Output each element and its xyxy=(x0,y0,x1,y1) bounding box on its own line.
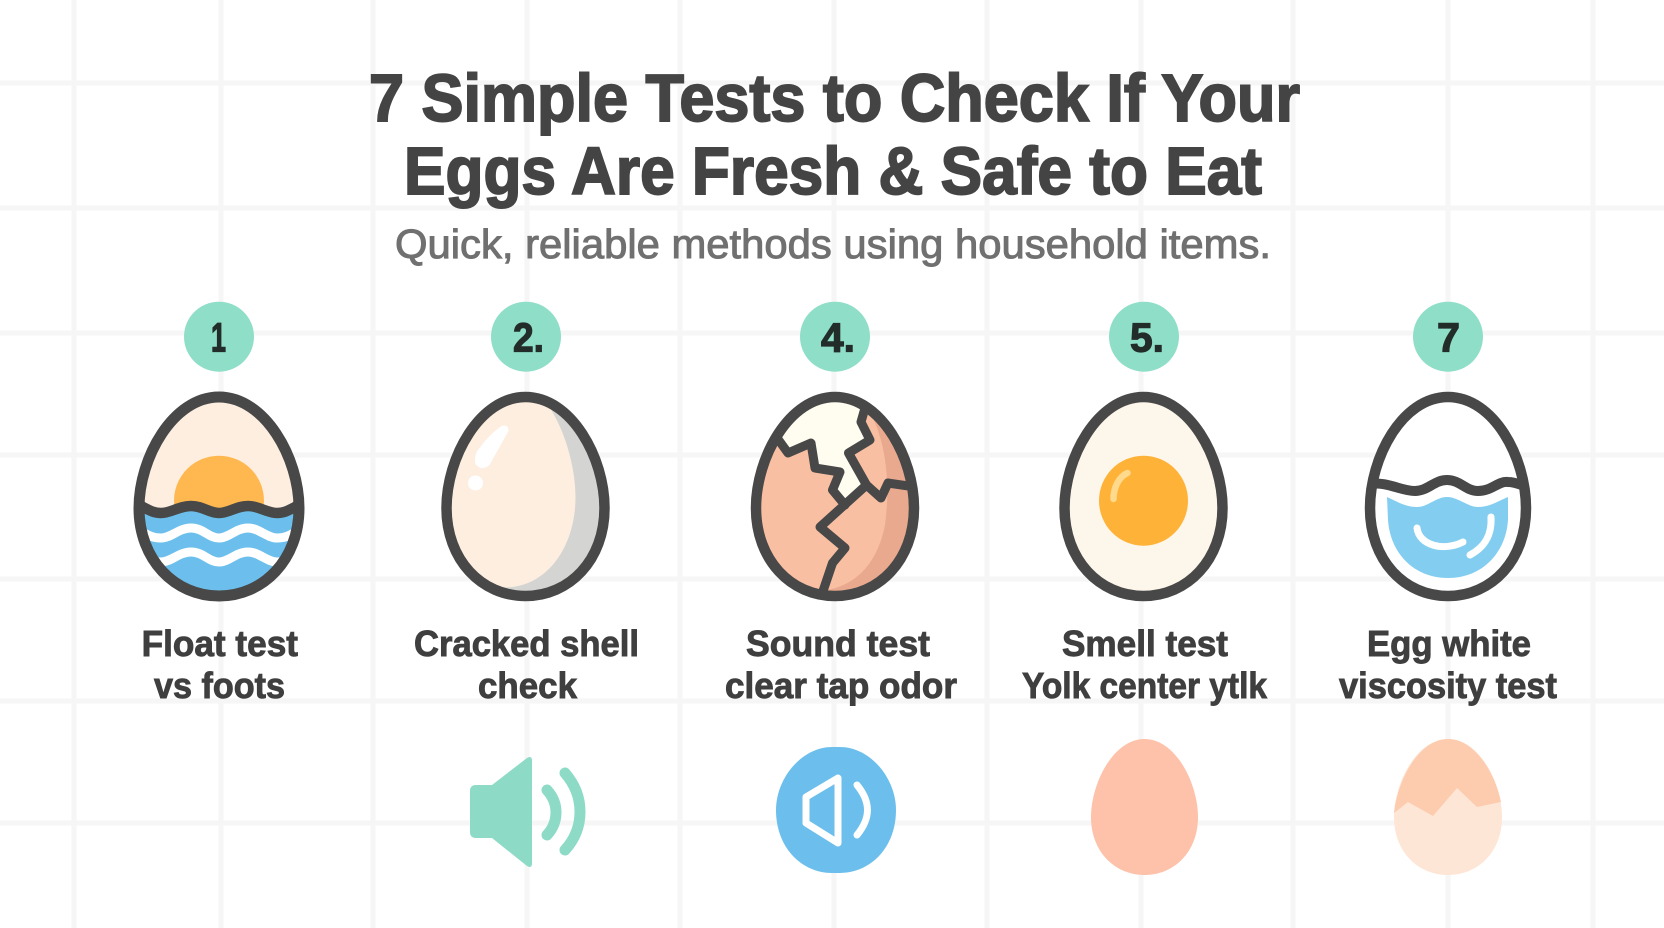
icon: whole egg with shine xyxy=(441,392,610,602)
title xyxy=(369,61,1300,209)
number badge 4 xyxy=(800,302,870,372)
number badge 7: 7 xyxy=(1437,315,1460,361)
icon: green speaker xyxy=(470,757,580,867)
icon: blue speaker badge xyxy=(776,747,896,873)
label: egg white viscosity test: Egg white xyxy=(1367,623,1531,664)
icon: plain peach egg xyxy=(1091,739,1198,875)
icon: two-tone egg xyxy=(1394,739,1502,875)
label: cracked shell check: check xyxy=(478,665,578,706)
label: float test xyxy=(142,623,298,706)
label: cracked shell check: Cracked shell xyxy=(414,623,639,664)
number badge 4: 4. xyxy=(821,315,855,361)
label: float test: Float test xyxy=(142,623,298,664)
subtitle: Quick, reliable methods using household items. xyxy=(395,221,1271,267)
label: float test: vs foots xyxy=(154,665,285,706)
number badge 5 xyxy=(1109,302,1179,372)
number badge 2: 2. xyxy=(513,315,544,361)
icon: cracked egg xyxy=(750,392,920,602)
number badge 5: 5. xyxy=(1130,315,1164,361)
label: sound test xyxy=(725,623,957,706)
number badge 2 xyxy=(491,302,561,372)
number badge 7 xyxy=(1413,302,1483,372)
number badge 1: 1 xyxy=(211,315,226,361)
label: smell test: Yolk center ytlk xyxy=(1022,665,1268,706)
label: egg white viscosity test xyxy=(1339,623,1557,706)
title: 7 Simple Tests to Check If Your xyxy=(369,61,1300,136)
title: Eggs Are Fresh & Safe to Eat xyxy=(404,134,1262,209)
icon: egg floating in water xyxy=(129,390,309,610)
label: egg white viscosity test: viscosity test xyxy=(1339,665,1557,706)
icon: egg with centered yolk xyxy=(1064,397,1222,596)
label: sound test: Sound test xyxy=(746,623,930,664)
label: cracked shell check xyxy=(414,623,639,706)
label: smell test: Smell test xyxy=(1062,623,1228,664)
label: sound test: clear tap odor xyxy=(725,665,957,706)
number badge 1 xyxy=(184,302,254,372)
icon: egg white viscosity xyxy=(1368,397,1528,596)
label: smell test xyxy=(1022,623,1268,706)
